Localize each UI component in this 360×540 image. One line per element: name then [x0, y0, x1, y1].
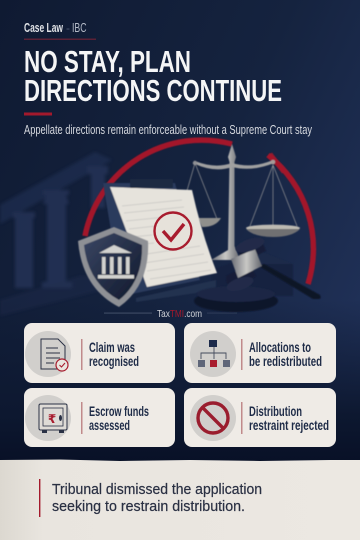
title: NO STAY, PLAN: [24, 44, 191, 79]
panel: escrow funds: assessed: [89, 417, 130, 433]
panel: allocations: be redistributed: [249, 353, 322, 369]
icon: prohibition sign: [190, 395, 236, 441]
illustration: clipboard with document: [103, 179, 217, 302]
accent bar: [24, 112, 52, 116]
conclusion text: [52, 482, 262, 515]
icon: rupee safe: ₹: [48, 412, 56, 426]
panel: escrow funds: [24, 388, 175, 447]
panel: claim recognised: Claim was: [89, 339, 135, 355]
illustration: faded courthouse columns: [0, 152, 112, 316]
illustration: red brush circle: [85, 140, 313, 284]
header label: IBC: [72, 21, 86, 35]
panel: conclusion paper strip: [0, 460, 360, 540]
icon: courthouse shield: [78, 227, 148, 307]
header label: Case Law: [24, 21, 63, 35]
panel: restraint rejected: restraint rejected: [249, 417, 329, 433]
header label: [24, 21, 96, 40]
icon: document with check: [25, 331, 71, 377]
brand: TaxTMI.com: [104, 308, 237, 320]
illustration: scales of justice: [180, 144, 300, 260]
title: [24, 44, 282, 108]
panel: escrow funds: Escrow funds: [89, 403, 149, 419]
conclusion text: Tribunal dismissed the application: [52, 482, 262, 498]
panel: allocations: [184, 323, 336, 383]
panel: restraint rejected: [184, 388, 336, 447]
icon: rupee safe: [25, 395, 71, 441]
panel: claim recognised: [24, 323, 175, 383]
conclusion text: seeking to restrain distribution.: [52, 499, 245, 515]
icon: hierarchy: [190, 331, 236, 377]
panel: allocations: Allocations to: [249, 339, 311, 355]
panel: claim recognised: recognised: [89, 353, 139, 369]
panel: restraint rejected: Distribution: [249, 403, 302, 419]
brand: TaxTMI.com: TaxTMI.com: [157, 308, 202, 320]
illustration: dark plinth behind gavel: [212, 252, 293, 296]
icon: red check stamp: [154, 212, 192, 250]
header label: -: [66, 21, 70, 35]
illustration: gavel and sound block: [194, 235, 321, 312]
